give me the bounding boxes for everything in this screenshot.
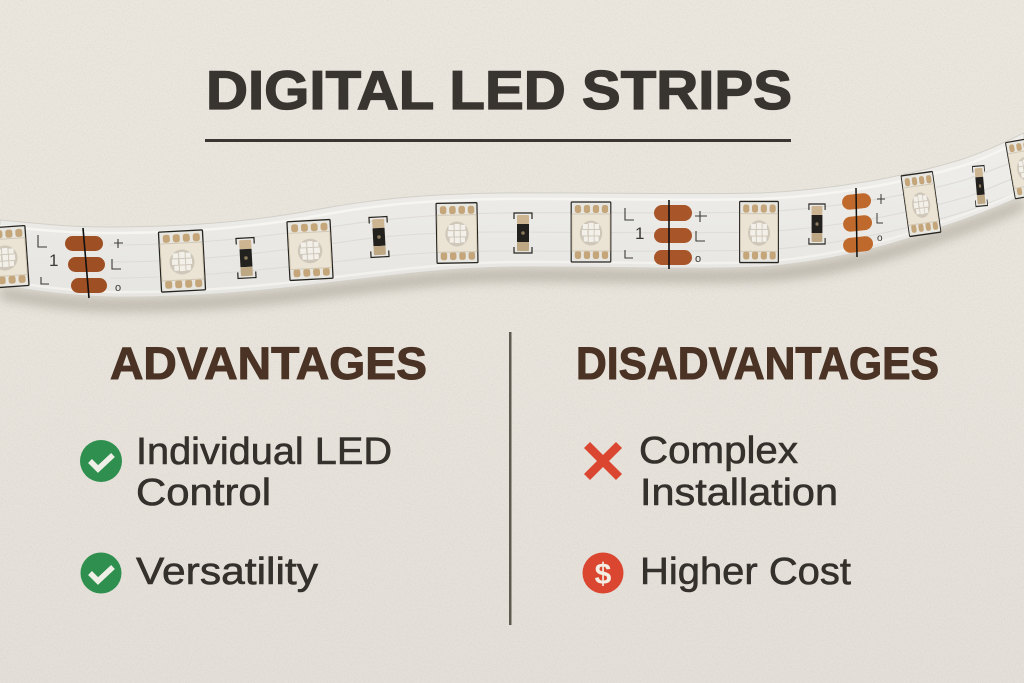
heading: advantages: ADVANTAGES — [110, 338, 427, 389]
solder pads left: o — [115, 282, 121, 294]
solder pads right — [841, 188, 885, 257]
text: individual LED control: Control — [136, 472, 271, 514]
strip ridges — [0, 139, 1024, 292]
text: complex installation: Installation — [640, 472, 838, 514]
icon: check individual LED control — [80, 440, 122, 482]
icon: dollar — [582, 552, 624, 594]
icon: check versatility — [80, 552, 122, 594]
LED modules — [0, 137, 1024, 292]
icon: cross — [587, 445, 619, 477]
heading: disadvantages: DISADVANTAGES — [576, 338, 939, 389]
title underline — [205, 139, 791, 142]
text: individual LED control: Individual LED — [136, 431, 392, 473]
LED strip — [0, 133, 1024, 310]
solder pads left — [38, 228, 123, 298]
small chips — [236, 166, 988, 278]
solder pads left: 1 — [49, 251, 58, 270]
strip body — [0, 133, 1024, 297]
column divider — [509, 332, 512, 625]
text: complex installation: Complex — [639, 430, 798, 472]
solder pads right: o — [877, 233, 883, 244]
icon: dollar: $ — [595, 558, 612, 591]
solder pads center: o — [695, 253, 701, 265]
text: versatility: Versatility — [136, 551, 318, 593]
solder pads center: 1 — [635, 224, 644, 243]
solder pads center — [625, 200, 707, 269]
title: DIGITAL LED STRIPS — [206, 59, 792, 121]
strip shadow — [0, 198, 1024, 310]
text: higher cost: Higher Cost — [640, 551, 851, 593]
